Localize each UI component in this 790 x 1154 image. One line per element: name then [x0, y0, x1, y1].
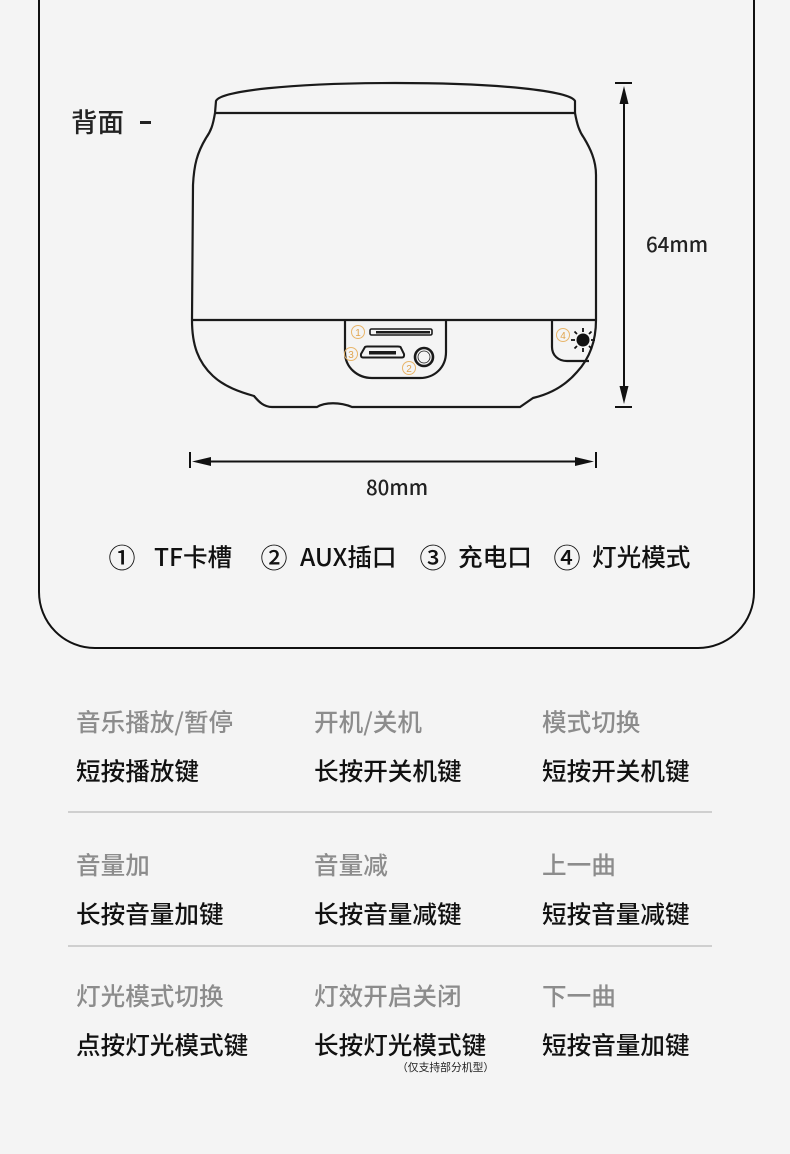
text: 音量减	[314, 846, 388, 882]
legend: TF卡槽	[154, 538, 232, 574]
row 3 headings: 灯光模式切换	[76, 977, 224, 1013]
text: 长按开关机键	[314, 752, 462, 788]
callout numbers: orange: 3	[348, 350, 354, 361]
callout numbers: orange: 1	[355, 328, 361, 339]
text: 模式切换	[542, 703, 640, 739]
icon: micro USB port	[361, 346, 404, 358]
text: 短按音量加键	[542, 1026, 690, 1062]
text: 开机/关机	[314, 703, 422, 739]
legend: AUX插口	[300, 538, 397, 574]
speaker back outline	[192, 83, 596, 407]
row 2 headings: 音量加	[76, 846, 150, 882]
icon: light sun	[571, 328, 595, 352]
icon: AUX jack	[415, 348, 433, 366]
legend: 充电口	[458, 538, 532, 574]
legend item 3: ③	[420, 537, 446, 576]
legend item 4: ④	[554, 537, 580, 576]
callout numbers: orange: 4	[560, 331, 566, 342]
panel outline	[39, 0, 754, 648]
heading: back: 背面	[71, 101, 124, 140]
label: width 80mm: 80mm	[366, 471, 428, 501]
row 2 actions: 长按音量加键	[76, 895, 224, 931]
legend: 灯光模式	[592, 538, 690, 574]
legend	[108, 537, 690, 576]
text: 短按开关机键	[542, 752, 690, 788]
text: 长按灯光模式键	[314, 1026, 486, 1062]
row 1 actions: 短按播放键	[76, 752, 199, 788]
arrow: width dimension	[190, 452, 596, 468]
light mode panel	[552, 320, 589, 361]
legend item 2: ②	[260, 537, 288, 576]
row 3 actions: 点按灯光模式键	[76, 1026, 248, 1062]
row 1 headings: 音乐播放/暂停	[76, 703, 233, 739]
port panel	[345, 320, 446, 378]
legend item 1: ①	[108, 537, 136, 576]
text: 短按音量减键	[542, 895, 690, 931]
text: 上一曲	[542, 846, 616, 882]
text: 下一曲	[542, 977, 616, 1013]
footnote: （仅支持部分机型）	[397, 1059, 494, 1075]
dash mark	[140, 121, 151, 124]
icon: TF card slot	[370, 329, 432, 335]
label: height 64mm: 64mm	[646, 228, 708, 258]
text: 长按音量减键	[314, 895, 462, 931]
callout numbers: orange	[344, 326, 570, 375]
text: 灯效开启关闭	[314, 977, 462, 1013]
panel: back view diagram	[38, 0, 755, 649]
arrow: height dimension	[615, 83, 632, 407]
callout numbers: orange: 2	[406, 364, 412, 375]
